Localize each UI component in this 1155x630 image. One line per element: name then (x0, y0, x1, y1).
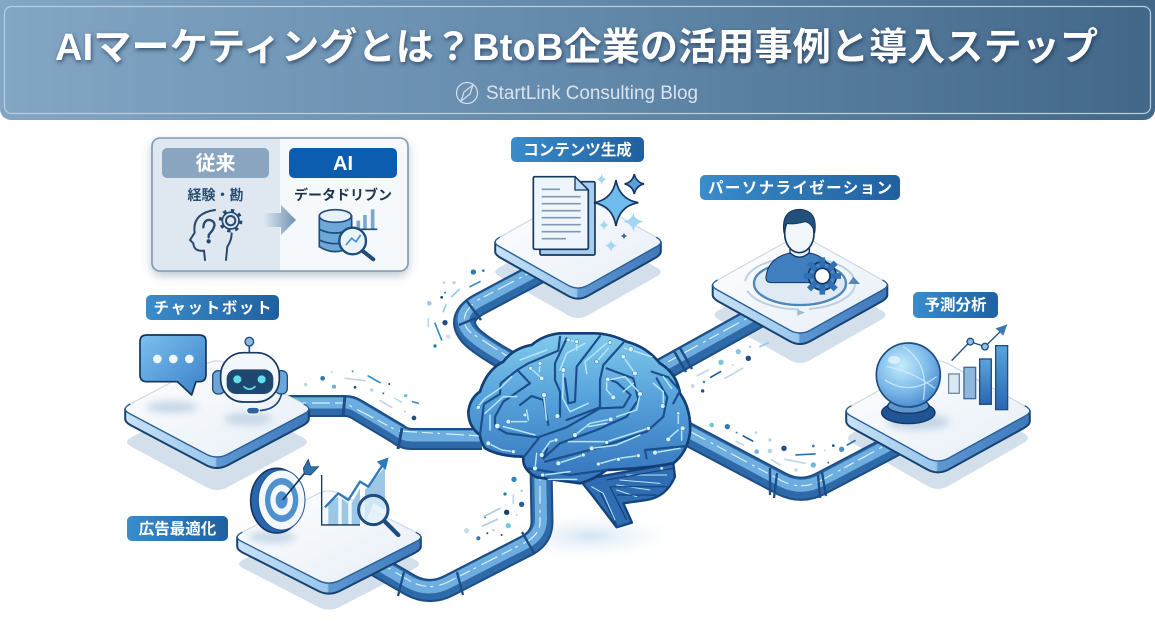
AI column (289, 148, 397, 259)
traditional column (162, 148, 269, 260)
icon: growth chart with magnifier (322, 457, 398, 535)
pipe: content to brain (459, 269, 540, 365)
label: ad optimization (127, 516, 228, 541)
label: chatbot: チャットボット (154, 299, 272, 317)
particles: chatbot stream (304, 370, 418, 420)
icon: robot (213, 337, 287, 414)
label: predictive analysis: 予測分析 (924, 295, 987, 314)
icon: crystal ball with bar chart (876, 324, 1008, 424)
icon: database with magnifier (319, 209, 377, 259)
icon: person with gear (745, 209, 860, 316)
label: chatbot (146, 295, 279, 320)
particles: content stream (427, 269, 485, 348)
pipe: predictive analysis to brain (676, 425, 900, 498)
particles: predictive stream (709, 423, 855, 472)
icon: target with arrow (251, 459, 319, 533)
AI column: データドリブン (294, 187, 392, 203)
traditional column: 従来 (196, 152, 236, 175)
platform: predictive analysis (846, 361, 1030, 472)
platform: personalization (713, 237, 887, 344)
title: AIマーケティングとは？BtoB企業の活用事例と導入ステップ (55, 27, 1098, 69)
pipe: chatbot to brain (288, 395, 482, 449)
icon: speech bubble (140, 335, 206, 395)
icon: document and sparkles (533, 174, 644, 255)
label: personalization: パーソナライゼーション (708, 178, 892, 197)
platform: ad optimization (237, 491, 421, 594)
header banner (0, 0, 1155, 120)
object shadows on platforms (146, 401, 950, 543)
cerebellum and brainstem (580, 463, 675, 527)
icon: compass logo (456, 82, 478, 104)
pipe: ad optimization to brain (371, 462, 542, 596)
comparison panel (152, 138, 408, 271)
label: predictive analysis (913, 292, 998, 318)
brain floor glow (495, 510, 685, 562)
platform shadows (127, 226, 1028, 610)
blog name: StartLink Consulting Blog (486, 83, 698, 104)
traditional column: 経験・勘 (188, 187, 244, 203)
particles: personalization stream (691, 343, 768, 393)
label: content generation (511, 137, 644, 162)
cerebrum (468, 333, 690, 483)
label: personalization (700, 175, 900, 200)
AI column: AI (333, 153, 353, 175)
label: content generation: コンテンツ生成 (523, 140, 632, 159)
arrow: traditional to AI (263, 205, 296, 235)
particles: ad stream (464, 477, 524, 540)
platform: content generation (495, 196, 661, 299)
central brain (468, 333, 690, 527)
brain fold lines (480, 336, 687, 475)
icon: head with question and gear (190, 210, 241, 260)
platform: chatbot (125, 361, 309, 468)
label: ad optimization: 広告最適化 (139, 519, 217, 538)
pipe: personalization to brain (658, 308, 768, 372)
brain circuit traces (476, 338, 685, 479)
